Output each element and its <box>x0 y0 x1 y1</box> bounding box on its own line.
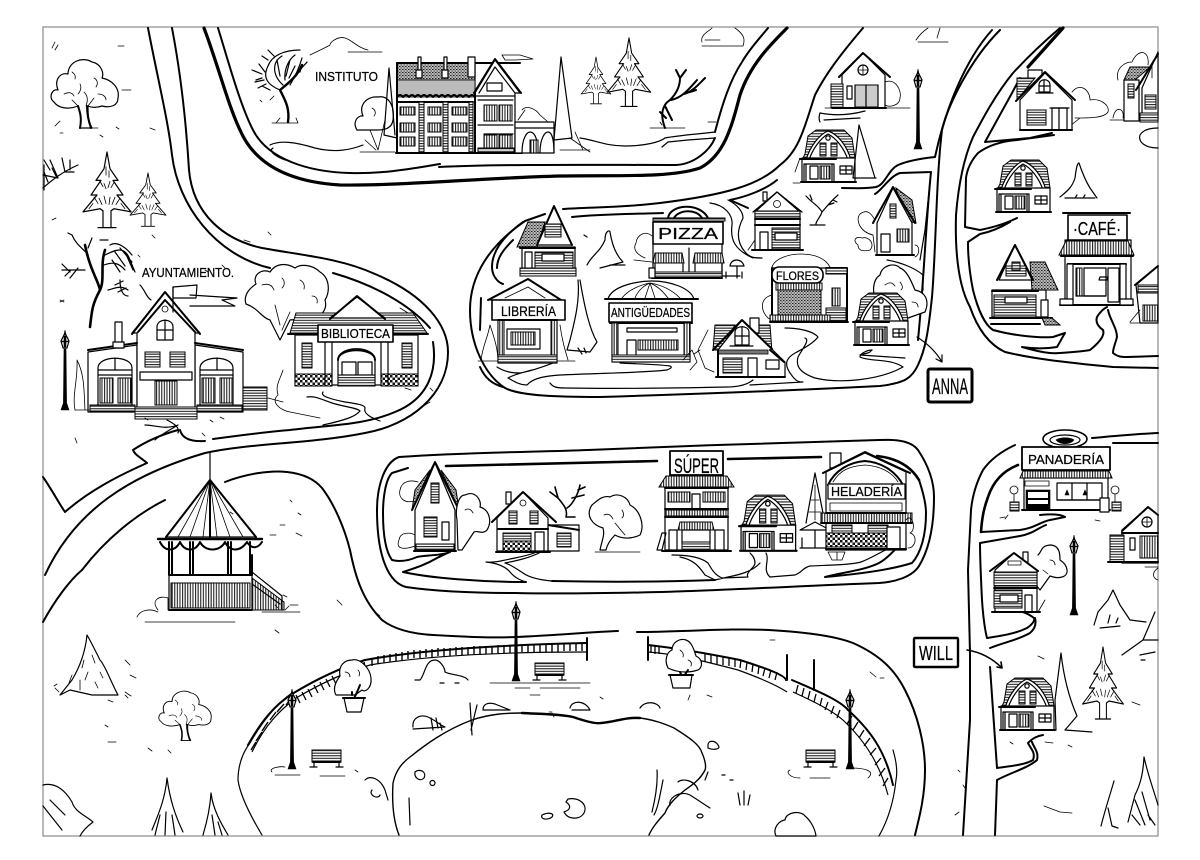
Heladería block buildings <box>398 451 915 560</box>
tree: bush left of Instituto <box>355 68 397 152</box>
bench: top centre <box>533 663 566 680</box>
ground lines: benches <box>271 767 871 778</box>
tree: behind house <box>1036 545 1067 590</box>
lamp post: top centre <box>512 601 520 681</box>
house: top left of café block <box>1016 70 1108 130</box>
house: small shop top-right <box>748 192 803 250</box>
building: Instituto <box>396 55 554 153</box>
building: Biblioteca <box>288 296 428 386</box>
houses: top middle <box>702 28 948 183</box>
cypress: right of Librería <box>567 280 597 354</box>
fence: left arc <box>248 638 587 752</box>
Panadería and Will side <box>914 430 1158 828</box>
label: Ayuntamiento: AYUNTAMIENTO. <box>142 265 234 280</box>
shop: Librería <box>478 279 575 363</box>
park <box>230 512 893 836</box>
reeds <box>409 703 750 825</box>
label: Will sign: WILL <box>919 643 953 665</box>
shrubs around lake <box>365 702 719 808</box>
tree: Ayuntamiento left <box>62 233 135 327</box>
pines: right side <box>1083 590 1158 828</box>
road: around the park and gazebo <box>43 471 925 836</box>
house: left of café <box>990 245 1060 325</box>
lamp post: Panadería <box>1070 535 1078 615</box>
label: Flores: FLORES <box>776 269 819 283</box>
branch tree <box>550 485 585 517</box>
Anna block buildings <box>478 187 972 402</box>
house: bottom centre <box>683 318 785 377</box>
bush: bottom right of park <box>775 813 816 836</box>
shop: Súper <box>657 451 734 551</box>
shop: Antigüedades <box>605 281 698 362</box>
label: Instituto: INSTITUTO <box>315 69 378 84</box>
house: Will's barn <box>999 678 1055 730</box>
shop: Panadería <box>1010 430 1121 512</box>
south-west scenery <box>43 433 301 836</box>
lamp post: Ayuntamiento <box>61 330 69 410</box>
road: Café block <box>956 28 1158 368</box>
road: left road and Biblioteca loop <box>43 28 448 575</box>
arrow: Ayuntamiento <box>140 285 151 300</box>
label: Librería: LIBRERÍA <box>501 304 556 319</box>
house: top right edge <box>1110 52 1158 122</box>
house: right edge of café block <box>1130 266 1158 323</box>
bench: right <box>804 750 837 767</box>
building: Café <box>1059 213 1134 305</box>
label: Súper: SÚPER <box>674 455 719 478</box>
walkway: Ayuntamiento <box>145 420 178 440</box>
trees: right of Instituto <box>554 38 716 152</box>
tree: lower left <box>159 691 211 740</box>
label: Will sign <box>914 638 958 667</box>
grass flecks: park <box>230 512 884 717</box>
house: with garage <box>492 492 579 552</box>
west meadow scenery <box>43 42 433 440</box>
lamp post: top middle <box>914 69 922 149</box>
Instituto section <box>252 28 948 183</box>
house: barn <box>739 495 797 551</box>
shop: Heladería <box>821 452 915 560</box>
arrow: to Anna <box>917 337 942 362</box>
label: Antigüedades: ANTIGÜEDADES <box>611 305 690 320</box>
bush: Biblioteca left <box>268 370 320 418</box>
fence: right arc <box>648 637 893 795</box>
pine: lower left <box>54 635 128 698</box>
tree branches: left edge <box>43 158 78 190</box>
planter tree: right <box>666 639 702 688</box>
label: Pizza: PIZZA <box>658 226 718 243</box>
walkway: Biblioteca <box>307 392 380 425</box>
label: Heladería: HELADERÍA <box>831 484 902 499</box>
cypress: Will <box>1055 653 1092 732</box>
pines: top left <box>83 152 166 228</box>
lamp posts: left and right <box>288 689 296 769</box>
tree: round <box>589 495 642 552</box>
house: right edge <box>1108 507 1158 580</box>
bench: left <box>310 750 343 767</box>
label: Café: ·CAFÉ· <box>1073 219 1121 239</box>
bush and ground line <box>137 597 300 622</box>
building: Ayuntamiento <box>74 285 267 419</box>
shop: Pizza <box>634 207 744 278</box>
branch tree: middle <box>806 195 838 225</box>
road: Anna block <box>470 28 1000 397</box>
gazebo <box>137 452 300 622</box>
house: gabled top-left <box>517 206 576 276</box>
label: Panadería: PANADERÍA <box>1028 452 1104 467</box>
bush: bottom left <box>43 784 93 836</box>
tree: Biblioteca <box>245 265 328 340</box>
bush: top middle <box>584 231 625 268</box>
label: Biblioteca sign: BIBLIOTECA <box>321 326 390 341</box>
house: tall gable <box>398 462 490 551</box>
shop: Flores <box>762 254 848 322</box>
lily pads and stones <box>415 770 733 819</box>
label: Anna sign <box>928 369 972 402</box>
grass flecks <box>145 232 433 422</box>
bush: behind fence <box>415 660 468 683</box>
house: gabled top right <box>855 187 919 257</box>
house: barn with tree <box>853 265 927 358</box>
road: Heladería block <box>377 440 934 593</box>
house: barn left <box>995 160 1051 212</box>
label: Anna sign: ANNA <box>932 374 968 399</box>
road: Instituto loop <box>204 28 787 185</box>
tree: Instituto left <box>252 50 307 123</box>
grass flecks <box>52 42 155 302</box>
ground line: top centre <box>490 683 590 688</box>
grass flecks <box>75 433 301 753</box>
arrow: to Will <box>967 650 1002 668</box>
cypress with patio <box>800 473 832 548</box>
planter tree: left <box>335 660 371 712</box>
lake <box>393 713 706 835</box>
tree: top left <box>51 60 118 128</box>
pines: bottom <box>152 778 228 835</box>
cloud: behind Instituto label <box>310 38 382 55</box>
grass flecks <box>955 515 1140 815</box>
bush: middle <box>1060 163 1097 198</box>
house: clapboard <box>990 552 1045 612</box>
road: Panadería and Will side <box>963 433 1158 835</box>
Café block buildings <box>990 52 1158 325</box>
